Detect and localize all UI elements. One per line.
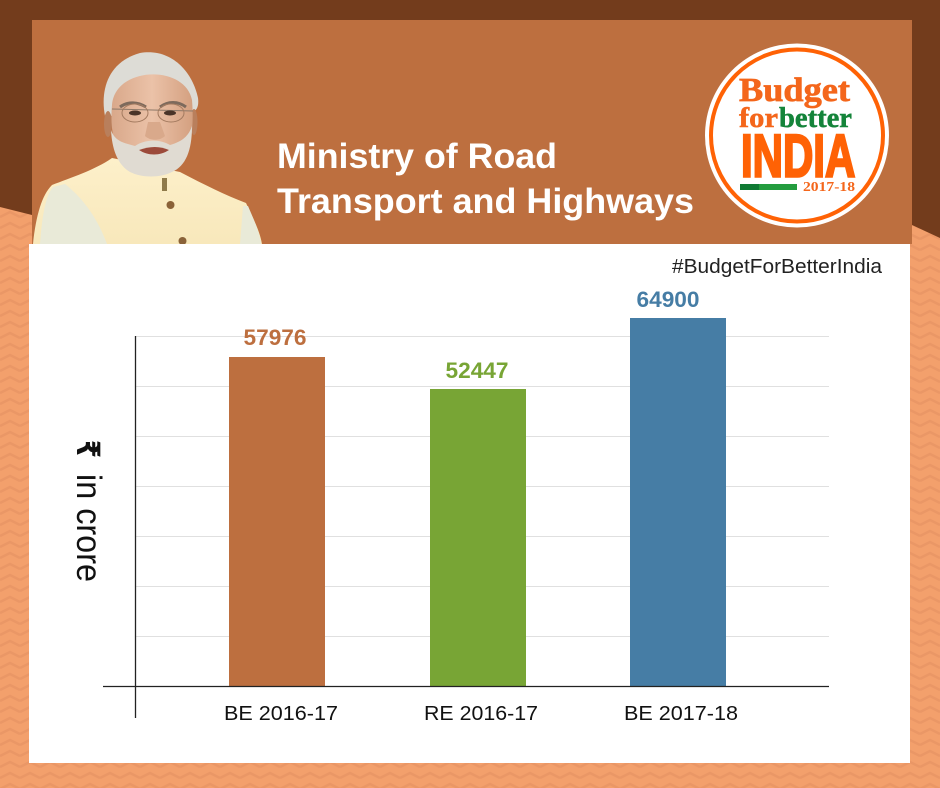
category labels: RE 2016-17 <box>424 703 538 725</box>
axes <box>103 336 829 718</box>
panel: header banner <box>32 20 912 244</box>
mouth <box>139 147 169 154</box>
beard <box>111 126 192 176</box>
bar: BE 2017-18 <box>630 318 726 686</box>
vest and shoulders <box>33 158 262 244</box>
bar chart <box>103 287 829 725</box>
bar: BE 2016-17 <box>229 357 325 686</box>
logo: Budget for better India <box>705 44 889 228</box>
ears <box>104 111 112 137</box>
collar shadow <box>162 178 167 191</box>
nose <box>145 122 165 140</box>
logo: Budget for better India: Budget <box>739 72 851 109</box>
hashtag: #BudgetForBetterIndia <box>672 256 883 278</box>
left sleeve <box>40 184 107 244</box>
category labels <box>224 703 738 725</box>
y-axis label: ₹ <box>69 440 107 458</box>
y-axis label: in crore <box>69 474 108 582</box>
category labels: BE 2016-17 <box>224 703 338 725</box>
bar: RE 2016-17 <box>430 389 526 686</box>
brows and glasses <box>120 102 186 107</box>
buttons <box>166 201 174 209</box>
title: Ministry of Road <box>277 137 557 176</box>
value labels: 64900 <box>636 287 700 312</box>
logo: Budget for better India: better <box>779 102 852 134</box>
value labels: 57976 <box>244 325 306 350</box>
value labels: 52447 <box>446 358 508 383</box>
category labels: BE 2017-18 <box>624 703 738 725</box>
panel: white chart area <box>29 244 910 763</box>
title <box>277 137 694 221</box>
logo: Budget for better India: 2017-18 <box>803 180 855 195</box>
face <box>111 74 193 165</box>
value labels <box>244 287 700 383</box>
logo: Budget for better India: for <box>739 102 778 134</box>
logo: Budget for better India: INDIA <box>741 122 855 189</box>
portrait of the Prime Minister <box>33 52 262 245</box>
hair <box>104 52 198 116</box>
title: Transport and Highways <box>277 182 694 221</box>
right sleeve <box>240 206 261 244</box>
